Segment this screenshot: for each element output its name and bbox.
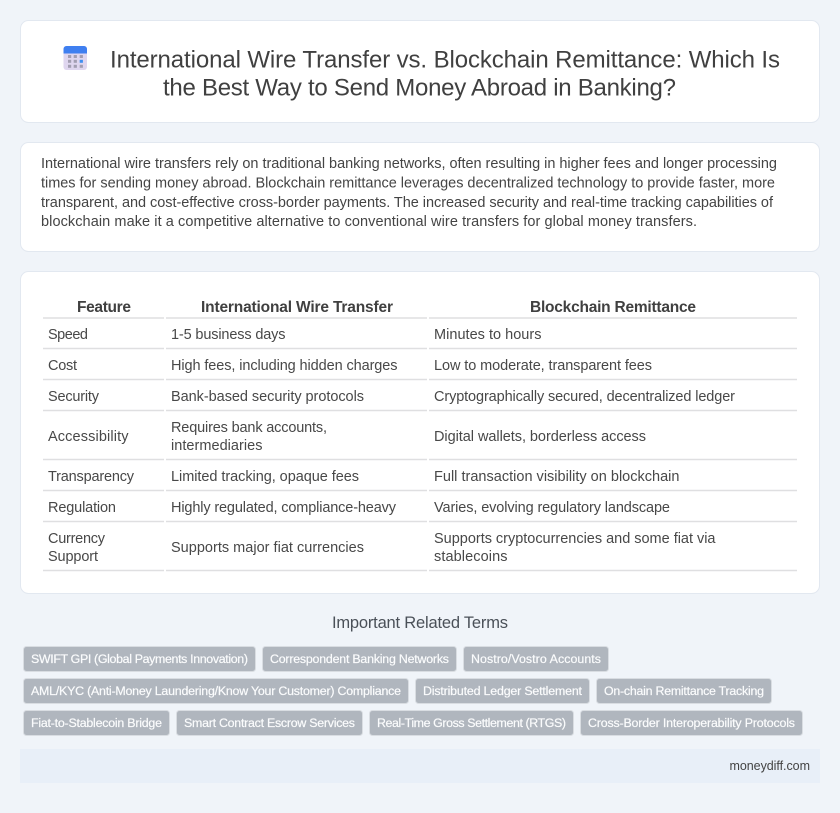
row: currency support: Support <box>48 549 98 565</box>
tag <box>416 678 590 704</box>
footer: moneydiff.com <box>730 759 810 773</box>
row: regulation: Varies, evolving regulatory landscape <box>434 500 670 516</box>
tag <box>370 710 574 736</box>
footer <box>20 749 820 783</box>
tag: Nostro/Vostro Accounts <box>471 652 601 666</box>
row: cost <box>48 358 652 374</box>
row: accessibility: Requires bank accounts, <box>171 420 327 436</box>
text block: introduction: International wire transfers rely on traditional banking networks, often resulting in higher fees and longer processing <box>41 156 777 172</box>
row: transparency <box>48 469 680 485</box>
row: accessibility: Digital wallets, borderless access <box>434 429 646 445</box>
row: currency support <box>48 531 716 565</box>
tag: Smart Contract Escrow Services <box>184 716 355 730</box>
row: speed <box>48 327 542 343</box>
table header row: Feature <box>77 299 131 316</box>
row: regulation: Highly regulated, compliance-heavy <box>171 500 397 516</box>
text block: introduction: blockchain make it a competitive alternative to conventional wire transfers for global money transfers. <box>41 214 697 230</box>
row: speed: Speed <box>48 327 88 343</box>
heading: important related terms: Important Related Terms <box>332 614 508 632</box>
panel: related term tags <box>24 646 802 736</box>
table header row: Blockchain Remittance <box>530 299 696 316</box>
text block: introduction: transparent, and cost-effective cross-border payments. The increased security and real-time tracking capabilities of <box>41 195 774 211</box>
panel: introduction text <box>20 142 820 252</box>
row: cost: Low to moderate, transparent fees <box>434 358 652 374</box>
panel: title header <box>20 20 820 122</box>
row: accessibility: Accessibility <box>48 429 129 445</box>
tag: On-chain Remittance Tracking <box>604 684 764 698</box>
row: transparency: Limited tracking, opaque fees <box>171 469 359 485</box>
tag <box>262 646 456 672</box>
row: transparency: Full transaction visibility on blockchain <box>434 469 680 485</box>
title: International Wire Transfer vs. Blockchain Remittance: Which Is <box>110 46 780 74</box>
text block: introduction <box>41 156 777 230</box>
row: security: Bank-based security protocols <box>171 389 364 405</box>
tag <box>580 710 802 736</box>
row: currency support: Supports major fiat currencies <box>171 540 364 556</box>
tag: Cross-Border Interoperability Protocols <box>588 716 795 730</box>
row: security: Cryptographically secured, decentralized ledger <box>434 389 735 405</box>
tag: Fiat-to-Stablecoin Bridge <box>31 716 162 730</box>
row: cost: High fees, including hidden charges <box>171 358 398 374</box>
text block: introduction: times for sending money abroad. Blockchain remittance leverages decentralized technology to provide faster, more <box>41 176 775 192</box>
panel: comparison table <box>20 272 820 594</box>
row: speed: 1-5 business days <box>171 327 286 343</box>
table header row <box>77 299 696 316</box>
tag: Distributed Ledger Settlement <box>423 684 583 698</box>
tag <box>24 646 256 672</box>
row: regulation <box>48 500 670 516</box>
row: security: Security <box>48 389 100 405</box>
row: security <box>48 389 735 405</box>
tag <box>464 646 608 672</box>
row: transparency: Transparency <box>48 469 135 485</box>
tag <box>176 710 362 736</box>
tag: Correspondent Banking Networks <box>270 652 449 666</box>
table header row: International Wire Transfer <box>201 299 393 316</box>
title: the Best Way to Send Money Abroad in Banking? <box>163 74 676 102</box>
tag: SWIFT GPI (Global Payments Innovation) <box>31 652 248 666</box>
icon: calendar grid <box>64 46 87 70</box>
tag: Real-Time Gross Settlement (RTGS) <box>377 716 566 730</box>
row: currency support: Currency <box>48 531 106 547</box>
row: currency support: Supports cryptocurrencies and some fiat via <box>434 531 716 547</box>
row: currency support: stablecoins <box>434 549 508 565</box>
row: accessibility <box>48 420 646 454</box>
row: cost: Cost <box>48 358 77 374</box>
tag: AML/KYC (Anti-Money Laundering/Know Your Customer) Compliance <box>31 684 401 698</box>
tag <box>596 678 772 704</box>
tag <box>24 678 408 704</box>
tag <box>24 710 170 736</box>
row: regulation: Regulation <box>48 500 116 516</box>
row: speed: Minutes to hours <box>434 327 542 343</box>
row: accessibility: intermediaries <box>171 438 262 454</box>
title <box>110 46 780 102</box>
